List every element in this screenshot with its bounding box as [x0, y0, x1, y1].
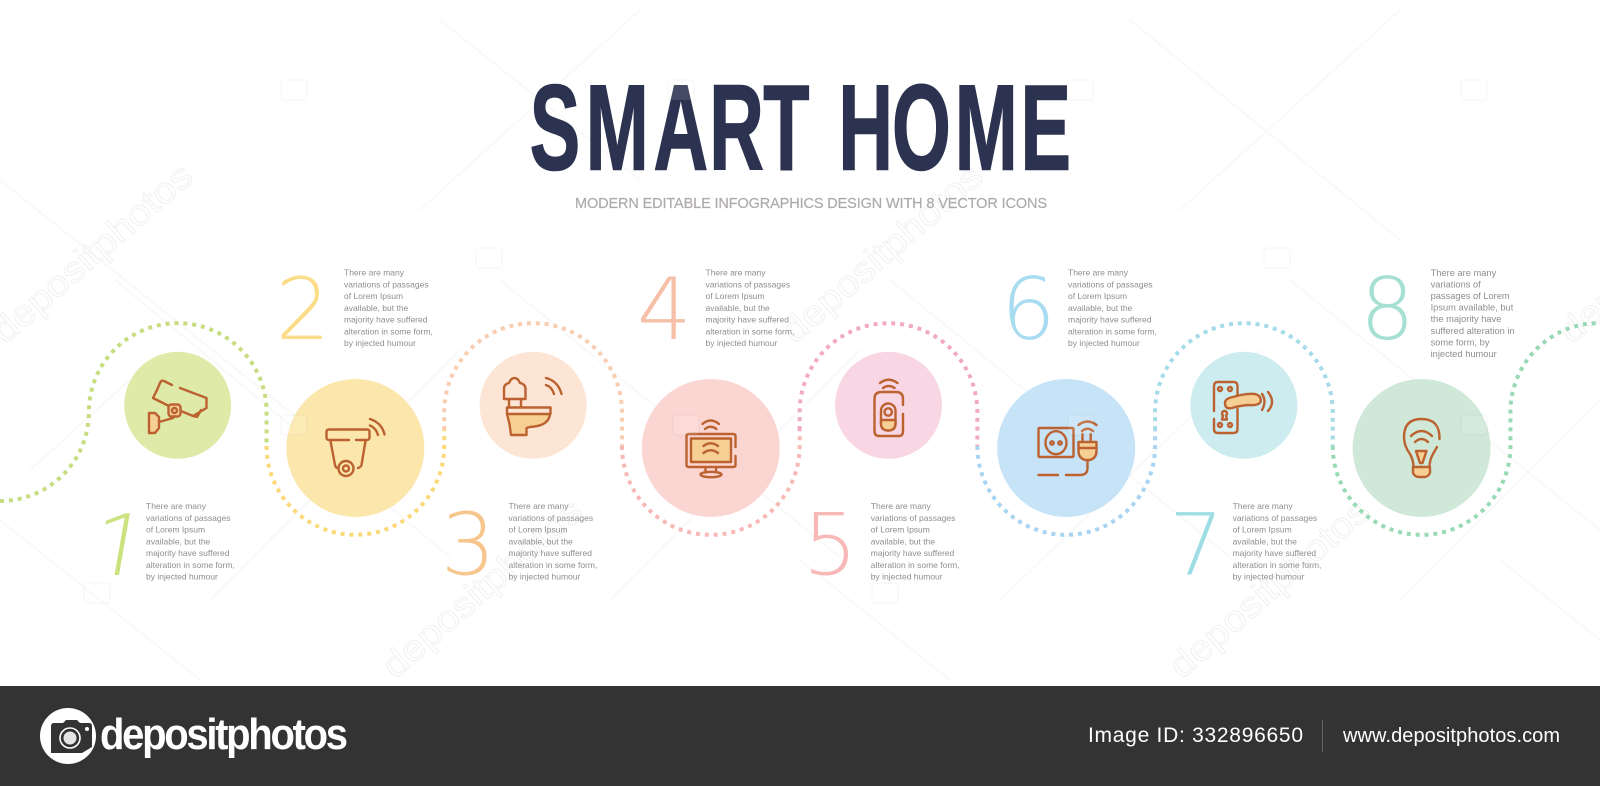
text block 1: variations of passages [146, 513, 231, 523]
text block 2: There are many [344, 268, 405, 278]
text block 5: variations of passages [871, 513, 955, 523]
text block 6: variations of passages [1068, 279, 1153, 289]
circle 3 [480, 352, 587, 459]
text block 3: of Lorem Ipsum [508, 524, 568, 534]
step 8 [1353, 260, 1515, 517]
circle 4 [642, 379, 780, 517]
watermark text: depositphotos [773, 155, 990, 351]
text block 3: available, but the [508, 536, 573, 546]
circle 1 [124, 352, 231, 459]
text block 7: There are many [1233, 501, 1293, 511]
text block 8: injected humour [1431, 349, 1497, 359]
text block 7: variations of passages [1233, 513, 1317, 523]
text block 2: majority have suffered [344, 315, 428, 325]
step 7 [1169, 352, 1321, 596]
circle 5 [835, 352, 942, 459]
text block 8: Ipsum available, but [1431, 303, 1514, 313]
text block 2: variations of passages [344, 279, 429, 289]
text block 2: alteration in some form, [344, 326, 433, 336]
icon: door handle [1214, 382, 1272, 433]
text block 3: alteration in some form, [508, 560, 597, 570]
number 4: 4 [637, 260, 692, 360]
text block 4: available, but the [706, 303, 770, 313]
circle 2 [286, 379, 424, 517]
text block 7: of Lorem Ipsum [1233, 524, 1292, 534]
step 2 [276, 260, 433, 517]
text block 7: available, but the [1233, 536, 1297, 546]
icon: dome camera [326, 419, 384, 476]
footer bar [0, 686, 1600, 786]
step 3 [441, 352, 597, 596]
text block 5: by injected humour [871, 572, 943, 582]
text block 3: by injected humour [508, 572, 580, 582]
text block 5: available, but the [871, 536, 935, 546]
text block 6: available, but the [1068, 303, 1133, 313]
text block 1: of Lorem Ipsum [146, 524, 205, 534]
watermark text: depositphotos [373, 490, 590, 686]
text block 8: the majority have [1431, 314, 1501, 324]
text block 8: suffered alteration in [1431, 326, 1515, 336]
text block 5: majority have suffered [871, 548, 955, 558]
text block 7: majority have suffered [1233, 548, 1316, 558]
watermark text: depositphotos [1160, 490, 1377, 686]
logo wordmark: depositphotos [100, 709, 348, 758]
text block 2: by injected humour [344, 338, 416, 348]
text block 1: There are many [146, 501, 207, 511]
text block 6: of Lorem Ipsum [1068, 291, 1127, 301]
number 7: 7 [1169, 496, 1224, 596]
number 6: 6 [1001, 260, 1056, 360]
text block 4: alteration in some form, [706, 326, 794, 336]
dotted wave connector [0, 323, 1600, 535]
subtitle: MODERN EDITABLE INFOGRAPHICS DESIGN WITH 8 VECTOR ICONS [575, 196, 1047, 212]
step 6 [997, 260, 1157, 517]
icon: security camera [149, 381, 206, 433]
step 1 [106, 352, 234, 581]
number 1: 1 [82, 497, 158, 601]
text block 1: alteration in some form, [146, 560, 235, 570]
text block 8: There are many [1431, 268, 1497, 278]
text block 4: variations of passages [706, 279, 790, 289]
website url: www.depositphotos.com [1342, 725, 1560, 747]
text block 3: There are many [508, 501, 569, 511]
text block 5: alteration in some form, [871, 560, 960, 570]
text block 5: of Lorem Ipsum [871, 524, 930, 534]
text block 4: There are many [706, 268, 766, 278]
text block 7: by injected humour [1233, 572, 1305, 582]
text block 2: available, but the [344, 303, 409, 313]
number 8: 8 [1360, 260, 1415, 360]
text block 5: There are many [871, 501, 932, 511]
text block 1: majority have suffered [146, 548, 230, 558]
logo: camera icon [40, 708, 96, 764]
step 5 [803, 352, 960, 596]
icon: smart bulb [1404, 419, 1440, 477]
number 3: 3 [441, 496, 496, 596]
icon: smart toilet [504, 378, 562, 435]
text block 8: some form, by [1431, 337, 1490, 347]
text block 4: majority have suffered [706, 315, 789, 325]
text block 6: majority have suffered [1068, 315, 1152, 325]
text block 6: by injected humour [1068, 338, 1140, 348]
step 4 [637, 260, 794, 517]
text block 1: available, but the [146, 536, 211, 546]
text block 4: of Lorem Ipsum [706, 291, 765, 301]
title: SMARTHOME [530, 59, 1071, 196]
image id: Image ID: 332896650 [1088, 724, 1303, 747]
text block 8: variations of [1431, 280, 1481, 290]
icon: remote control [874, 380, 903, 436]
circle 6 [997, 379, 1135, 517]
text block 2: of Lorem Ipsum [344, 291, 403, 301]
icon: smart plug [1038, 422, 1096, 475]
text block 6: There are many [1068, 268, 1129, 278]
text block 6: alteration in some form, [1068, 326, 1157, 336]
text block 3: majority have suffered [508, 548, 592, 558]
text block 8: passages of Lorem [1431, 291, 1510, 301]
text block 1: by injected humour [146, 572, 218, 582]
number 2: 2 [276, 260, 330, 360]
text block 4: by injected humour [706, 338, 777, 348]
circle 8 [1353, 379, 1491, 517]
circle 7 [1190, 352, 1297, 459]
number 5: 5 [803, 496, 858, 596]
text block 7: alteration in some form, [1233, 560, 1321, 570]
icon: smart tv [686, 420, 736, 477]
watermark text [0, 155, 1600, 686]
text block 3: variations of passages [508, 513, 593, 523]
